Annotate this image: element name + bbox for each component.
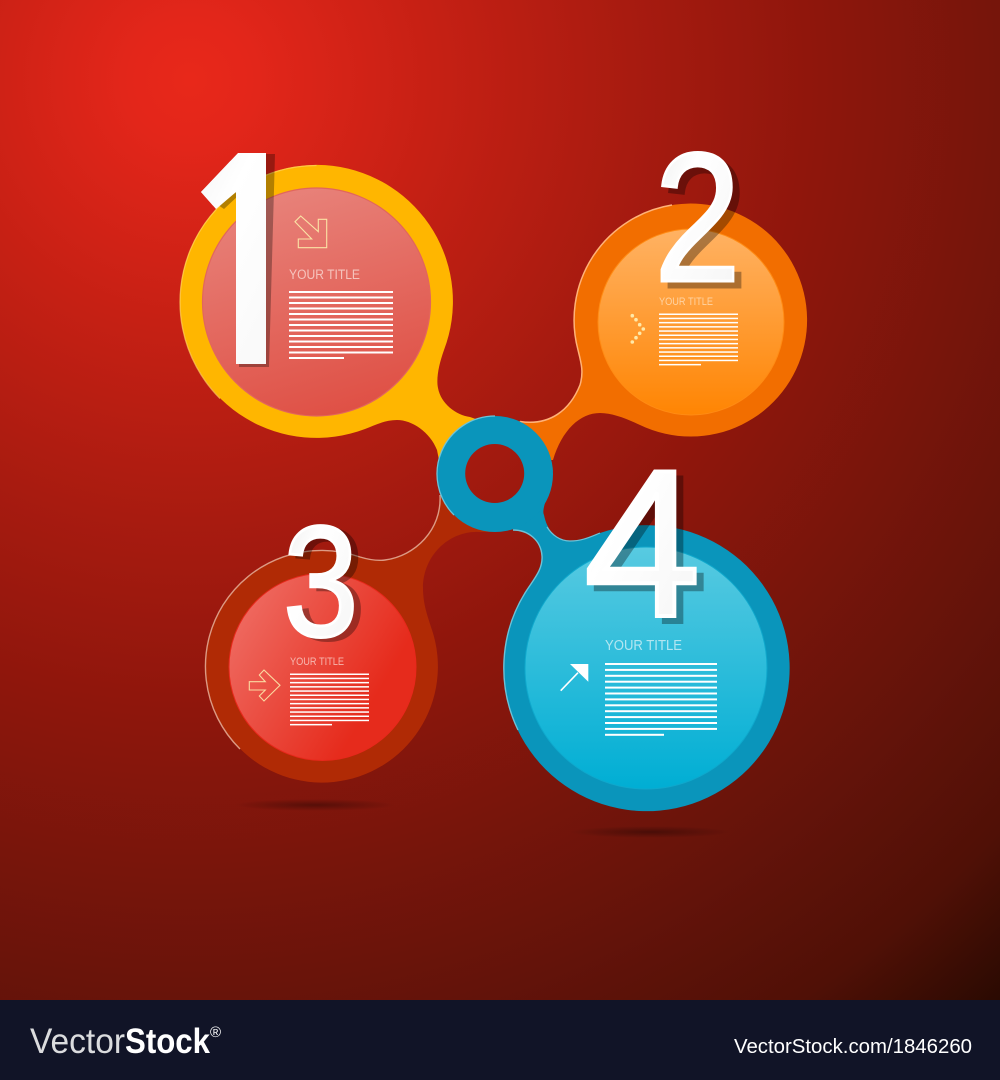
ground shadow: circle 4 [570, 826, 730, 838]
numeral 1: 1 [165, 91, 333, 428]
icon: dotted chevron [630, 314, 645, 344]
footer logo [30, 1022, 221, 1061]
numeral 1: 1 [172, 93, 340, 430]
footer logo: ® [210, 1024, 221, 1041]
central ring [437, 416, 553, 532]
text lines 3 [290, 674, 369, 725]
panel 3: red [205, 490, 495, 783]
numeral 2: 2 [654, 115, 741, 321]
footer bar [0, 1000, 1000, 1080]
title 4: YOUR TITLE [605, 637, 682, 654]
title 1: YOUR TITLE [289, 267, 360, 282]
footer logo: Vector [30, 1022, 125, 1061]
footer id: VectorStock.com/1846260 [734, 1036, 972, 1058]
numeral 3: 3 [290, 497, 366, 673]
numeral 4: 4 [584, 426, 701, 661]
panel 1: yellow [180, 165, 490, 470]
numeral 2: 2 [661, 121, 748, 327]
text lines 1 [289, 291, 393, 359]
icon: outline arrow down-right [295, 216, 327, 248]
numeral 4: 4 [591, 432, 708, 667]
text lines 4 [605, 663, 717, 736]
title 2: YOUR TITLE [659, 296, 713, 308]
text lines 2 [659, 314, 738, 365]
icon: arrow up-right [561, 664, 588, 691]
numeral 1 [201, 153, 275, 367]
numeral 3: 3 [283, 494, 359, 670]
panel 4: blue [504, 470, 790, 811]
footer logo: Stock [125, 1022, 210, 1061]
ground shadow: circle 3 [235, 799, 395, 811]
panel 2: orange [510, 204, 807, 460]
title 3: YOUR TITLE [290, 656, 344, 668]
icon: outline arrow right [249, 670, 280, 701]
